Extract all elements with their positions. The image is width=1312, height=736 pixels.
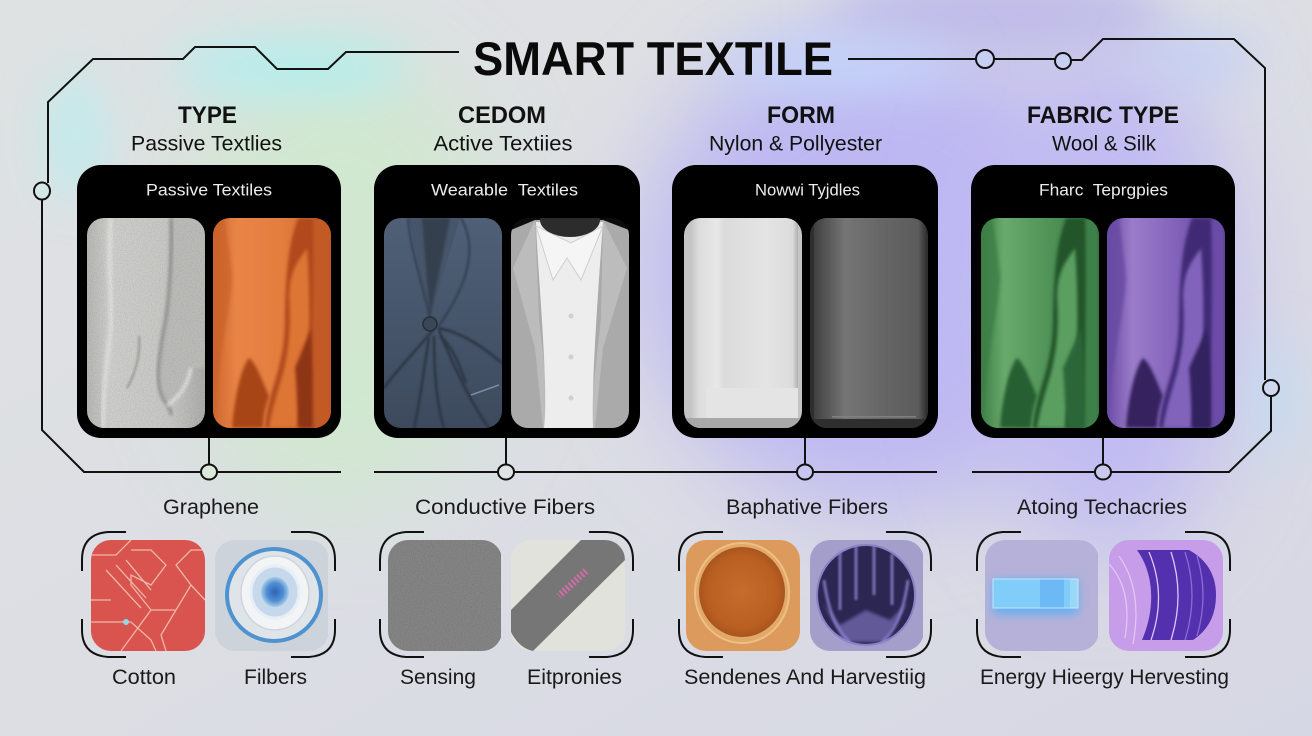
panel: fabric properties [971, 165, 1235, 438]
heading: cedom: CEDOM [458, 102, 546, 129]
connector: columns 2 and 3 [374, 438, 937, 480]
heading: form: FORM [767, 102, 835, 129]
thumbnail: glowing blue bar [985, 540, 1098, 651]
circuit line: top left to left side [34, 47, 459, 472]
caption: sendenes and harvestiig: Sendenes And Harvestiig [684, 666, 926, 689]
caption: energy hieergy hervesting: Energy Hieergy Hervesting [980, 666, 1229, 689]
brackets group 1 [82, 532, 335, 657]
thumbnail: purple coil [1109, 540, 1223, 651]
swatch: orange fabric [213, 218, 331, 428]
thumbnail: red circuit fabric [91, 540, 205, 651]
swatch: green fabric [981, 218, 1099, 428]
caption: cotton: Cotton [112, 666, 176, 689]
heading: cedom [434, 102, 572, 156]
section label: graphene: Graphene [163, 496, 259, 519]
section label: baphative fibers: Baphative Fibers [726, 496, 888, 519]
brackets group 2 [380, 532, 633, 657]
heading: fabric type: FABRIC TYPE [1027, 102, 1179, 129]
swatch: grey blazer and white shirt [511, 203, 629, 428]
section label: atoing techacries: Atoing Techacries [1017, 496, 1187, 519]
panel: passive textiles: Passive Textiles [146, 180, 272, 200]
heading: fabric type [1027, 102, 1179, 156]
heading: cedom: Active Textiies [434, 132, 572, 156]
panel: passive textiles [77, 165, 341, 438]
connector: column 4 [1095, 438, 1111, 480]
swatch: purple fabric [1107, 218, 1225, 428]
thumbnail: grey sleeve on cream [511, 540, 625, 651]
thumbnail: violet striped lens [810, 540, 923, 651]
heading: type: Passive Textlies [131, 132, 282, 156]
column headings [131, 102, 1179, 156]
connector: column 1 [201, 438, 217, 480]
brackets group 3 [679, 532, 931, 657]
thumbnail: grey textured fabric [388, 540, 501, 651]
panel: nonwoven textiles: Nowwi Tyjdles [755, 180, 860, 200]
brackets group 4 [977, 532, 1230, 657]
caption: eitpronies: Eitpronies [527, 666, 622, 689]
title: SMART TEXTILE [473, 32, 833, 85]
thumbnail: orange dish [686, 540, 800, 651]
swatch: grey fabric [87, 218, 205, 428]
heading: fabric type: Wool & Silk [1052, 132, 1156, 156]
heading: form: Nylon & Pollyester [709, 132, 882, 156]
section label: conductive fibers: Conductive Fibers [415, 496, 595, 519]
heading: form [709, 102, 882, 156]
panel: fabric properties: Fharc Teprgpies [1039, 180, 1168, 200]
swatch: white cloth [684, 218, 802, 428]
swatch: navy wrap jacket [384, 218, 502, 428]
caption: filbers: Filbers [244, 666, 307, 689]
swatch: dark grey cloth [810, 218, 928, 428]
thumbnail: blue concentric disc [215, 540, 328, 651]
caption: sensing: Sensing [400, 666, 476, 689]
circuit line: top right to right side [848, 39, 1279, 472]
panel: nonwoven textiles [672, 165, 938, 438]
panel: wearable textiles [374, 165, 640, 438]
heading: type: TYPE [178, 102, 237, 129]
heading: type [131, 102, 282, 156]
panel: wearable textiles: Wearable Textiles [431, 180, 578, 200]
